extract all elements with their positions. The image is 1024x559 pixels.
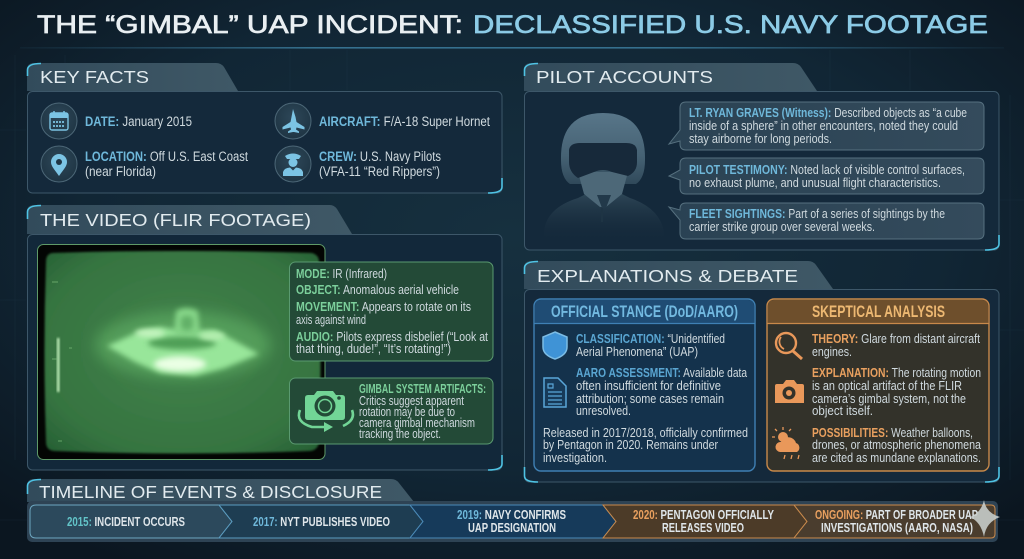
gimbal artifacts box: tracking the object. <box>359 426 441 441</box>
info box: OBJECT: Anomalous aerial vehicle <box>296 282 459 297</box>
date text: DATE: January 2015 <box>85 114 192 129</box>
skeptical analysis box <box>767 299 989 471</box>
crew text <box>319 149 441 179</box>
icon: sparkle <box>970 500 1000 537</box>
explanation text <box>812 365 981 418</box>
video tab <box>27 205 352 234</box>
AARO assessment text: often insufficient for definitive <box>576 378 721 393</box>
location text: LOCATION: Off U.S. East Coast <box>85 149 248 164</box>
step: 2020 <box>603 505 807 538</box>
gimbal artifacts box: rotation may be due to <box>359 404 455 419</box>
possibilities text: drones, or atmospheric phenomena <box>812 437 982 452</box>
crew text: CREW: U.S. Navy Pilots <box>319 149 441 164</box>
theory text: engines. <box>812 344 852 359</box>
info box: that thing, dude!”, “It’s rotating!”) <box>296 341 451 356</box>
step: 2020: RELEASES VIDEO <box>662 520 744 535</box>
quote: pilot testimony: PILOT TESTIMONY: Noted lack of visible control surfaces, <box>689 162 965 177</box>
AARO assessment text: AARO ASSESSMENT: Available data <box>576 365 748 380</box>
timeline heading: TIMELINE OF EVENTS & DISCLOSURE <box>39 482 382 502</box>
step: 2019: UAP DESIGNATION <box>468 520 556 535</box>
skeptical heading: SKEPTICAL ANALYSIS <box>812 303 945 321</box>
theory text <box>812 331 980 359</box>
theory text: THEORY: Glare from distant aircraft <box>812 331 980 346</box>
title: THE “GIMBAL” UAP INCIDENT: <box>37 11 463 39</box>
classification text: CLASSIFICATION: “Unidentified <box>576 331 725 346</box>
key facts heading: KEY FACTS <box>40 67 149 87</box>
icon: calendar <box>41 103 77 139</box>
info box: MOVEMENT: Appears to rotate on its <box>296 299 471 314</box>
explanations tab <box>524 261 833 289</box>
info box: MODE: IR (Infrared) <box>296 266 387 281</box>
icon: location pin <box>41 146 77 182</box>
step: 2015: 2015: INCIDENT OCCURS <box>67 514 185 529</box>
release status text: investigation. <box>543 450 607 465</box>
pilot accounts tab <box>524 63 817 91</box>
crew text: (VFA-11 “Red Rippers”) <box>319 164 440 179</box>
AARO assessment text: attribution; some cases remain <box>576 391 724 406</box>
step: 2017: 2017: NYT PUBLISHES VIDEO <box>253 514 390 529</box>
info box: AUDIO: Pilots express disbelief (“Look at <box>296 329 488 344</box>
icon: pilot crew <box>275 146 311 182</box>
icon: document <box>544 378 566 407</box>
panel: timeline <box>27 479 998 542</box>
panel: the video <box>27 205 502 470</box>
panel: key facts <box>27 63 502 193</box>
panel: explanations and debate <box>524 261 999 482</box>
step: ongoing: INVESTIGATIONS (AARO, NASA) <box>821 520 973 535</box>
AARO assessment text: unresolved. <box>576 403 631 418</box>
explanation text: camera’s gimbal system, not the <box>812 391 966 406</box>
pilot accounts heading: PILOT ACCOUNTS <box>536 67 713 87</box>
quote: fleet sightings: FLEET SIGHTINGS: Part of a series of sightings by the <box>689 206 945 221</box>
explanation text: is an optical artifact of the FLIR <box>812 378 962 393</box>
key facts tab <box>27 63 238 91</box>
video heading: THE VIDEO (FLIR FOOTAGE) <box>40 210 311 230</box>
quote: fleet sightings <box>669 203 984 239</box>
location text: (near Florida) <box>85 164 156 179</box>
quote: Ryan Graves: stay airborne for long periods. <box>689 131 832 146</box>
release status text: Released in 2017/2018, officially confirmed <box>543 425 748 440</box>
info box: axis against wind <box>296 312 366 327</box>
quote: fleet sightings: carrier strike group over several weeks. <box>689 219 875 234</box>
official stance box <box>534 299 755 471</box>
step: 2020: 2020: PENTAGON OFFICIALLY <box>633 507 774 522</box>
gimbal artifacts box <box>290 378 493 444</box>
quote: Ryan Graves <box>669 102 984 150</box>
quote: pilot testimony <box>669 158 984 194</box>
quote: pilot testimony: no exhaust plume, and unusual flight characteristics. <box>689 175 941 190</box>
explanation text: object itself. <box>812 403 873 418</box>
gimbal artifacts box: GIMBAL SYSTEM ARTIFACTS: <box>359 381 486 396</box>
gimbal artifacts box: camera gimbal mechanism <box>359 415 475 430</box>
explanation text: EXPLANATION: The rotating motion <box>812 365 981 380</box>
icon: jet <box>275 103 311 139</box>
icon: shield <box>543 332 567 359</box>
icon: pilot silhouette <box>544 113 664 240</box>
location text <box>85 149 248 179</box>
explanations heading: EXPLANATIONS & DEBATE <box>537 266 798 286</box>
step: 2019: 2019: NAVY CONFIRMS <box>457 507 566 522</box>
step: 2015 <box>30 505 232 538</box>
release status text: by Pentagon in 2020. Remains under <box>543 437 719 452</box>
icon: weather <box>772 427 799 459</box>
release status text <box>543 425 748 465</box>
official stance heading: OFFICIAL STANCE (DoD/AARO) <box>551 303 738 321</box>
panel: pilot accounts <box>524 63 999 250</box>
gimbal artifacts box: Critics suggest apparent <box>359 393 464 408</box>
icon: camera <box>775 380 804 403</box>
possibilities text: POSSIBILITIES: Weather balloons, <box>812 425 973 440</box>
title: DECLASSIFIED U.S. NAVY FOOTAGE <box>473 11 988 39</box>
step: ongoing: ONGOING: PART OF BROADER UAP <box>815 507 978 522</box>
icon: rotating camera <box>299 391 353 432</box>
possibilities text <box>812 425 982 465</box>
step: 2017 <box>219 505 423 538</box>
classification text: Aerial Phenomena” (UAP) <box>576 344 698 359</box>
quote: Ryan Graves: LT. RYAN GRAVES (Witness): Described objects as “a cube <box>689 105 967 120</box>
AARO assessment text <box>576 365 748 418</box>
quote: Ryan Graves: inside of a sphere” in other encounters, noted they could <box>689 118 958 133</box>
FLIR screen <box>38 244 325 460</box>
step: 2019 <box>410 505 616 538</box>
step: ongoing <box>794 505 995 538</box>
possibilities text: are cited as mundane explanations. <box>812 450 981 465</box>
UFO <box>95 308 271 379</box>
info box <box>290 262 493 361</box>
aircraft text: AIRCRAFT: F/A-18 Super Hornet <box>319 114 490 129</box>
title <box>37 11 988 39</box>
icon: magnifier <box>776 333 802 359</box>
classification text <box>576 331 725 359</box>
timeline tab <box>27 479 414 502</box>
